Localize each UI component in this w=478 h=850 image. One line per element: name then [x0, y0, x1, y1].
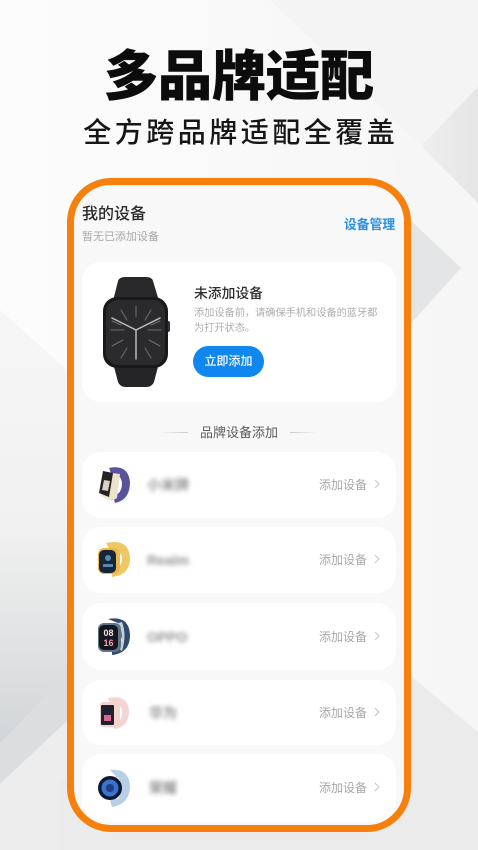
card description [194, 307, 377, 334]
icon: blue round watch [98, 770, 130, 807]
add label: 添加设备 [319, 553, 367, 567]
card description: 为打开状态。 [194, 322, 255, 334]
icon: purple band [99, 467, 130, 503]
icon: black watch [103, 277, 170, 387]
brand name blurred: 华为 [149, 704, 177, 720]
card heading: 未添加设备 [194, 286, 263, 301]
section heading: brand device add: 品牌设备添加 [200, 425, 278, 440]
panel: no device card [82, 262, 396, 402]
subtitle: 全方跨品牌适配全覆盖 [83, 117, 398, 148]
sub heading: 暂无已添加设备 [82, 231, 159, 243]
icon: chevron [374, 782, 380, 792]
add label: 添加设备 [319, 630, 367, 644]
icon: navy watch [98, 618, 130, 655]
icon: chevron [374, 708, 380, 716]
icon: navy watch: 08 [103, 628, 114, 638]
manage link: 设备管理 [344, 217, 395, 232]
brand name blurred: 小米牌 [147, 477, 189, 493]
add label: 添加设备 [319, 706, 367, 720]
add label: 添加设备 [319, 478, 367, 492]
icon: pink band [100, 697, 129, 729]
brand name blurred: 荣耀 [149, 780, 177, 796]
header: my devices [82, 205, 159, 243]
brand name blurred: Realm [147, 552, 189, 568]
add now button: 立即添加 [204, 354, 252, 368]
icon: yellow band [98, 542, 130, 577]
icon: chevron [374, 632, 380, 640]
phone frame panel [67, 178, 411, 832]
icon: chevron [374, 554, 380, 564]
icon: chevron [374, 480, 380, 488]
add label: 添加设备 [319, 781, 367, 795]
row: brand 2 [82, 527, 396, 593]
title: 多品牌适配 [104, 47, 374, 107]
icon: navy watch: 16 [103, 638, 114, 648]
heading: 我的设备 [82, 206, 146, 223]
card description: 添加设备前，请确保手机和设备的蓝牙都 [194, 308, 377, 319]
add now button [193, 346, 264, 377]
row: brand 4 [82, 680, 396, 745]
row: brand 3 [82, 603, 396, 670]
row: brand 1 [82, 452, 396, 518]
row: brand 5 [82, 754, 396, 822]
brand name blurred: OPPO [147, 628, 187, 644]
